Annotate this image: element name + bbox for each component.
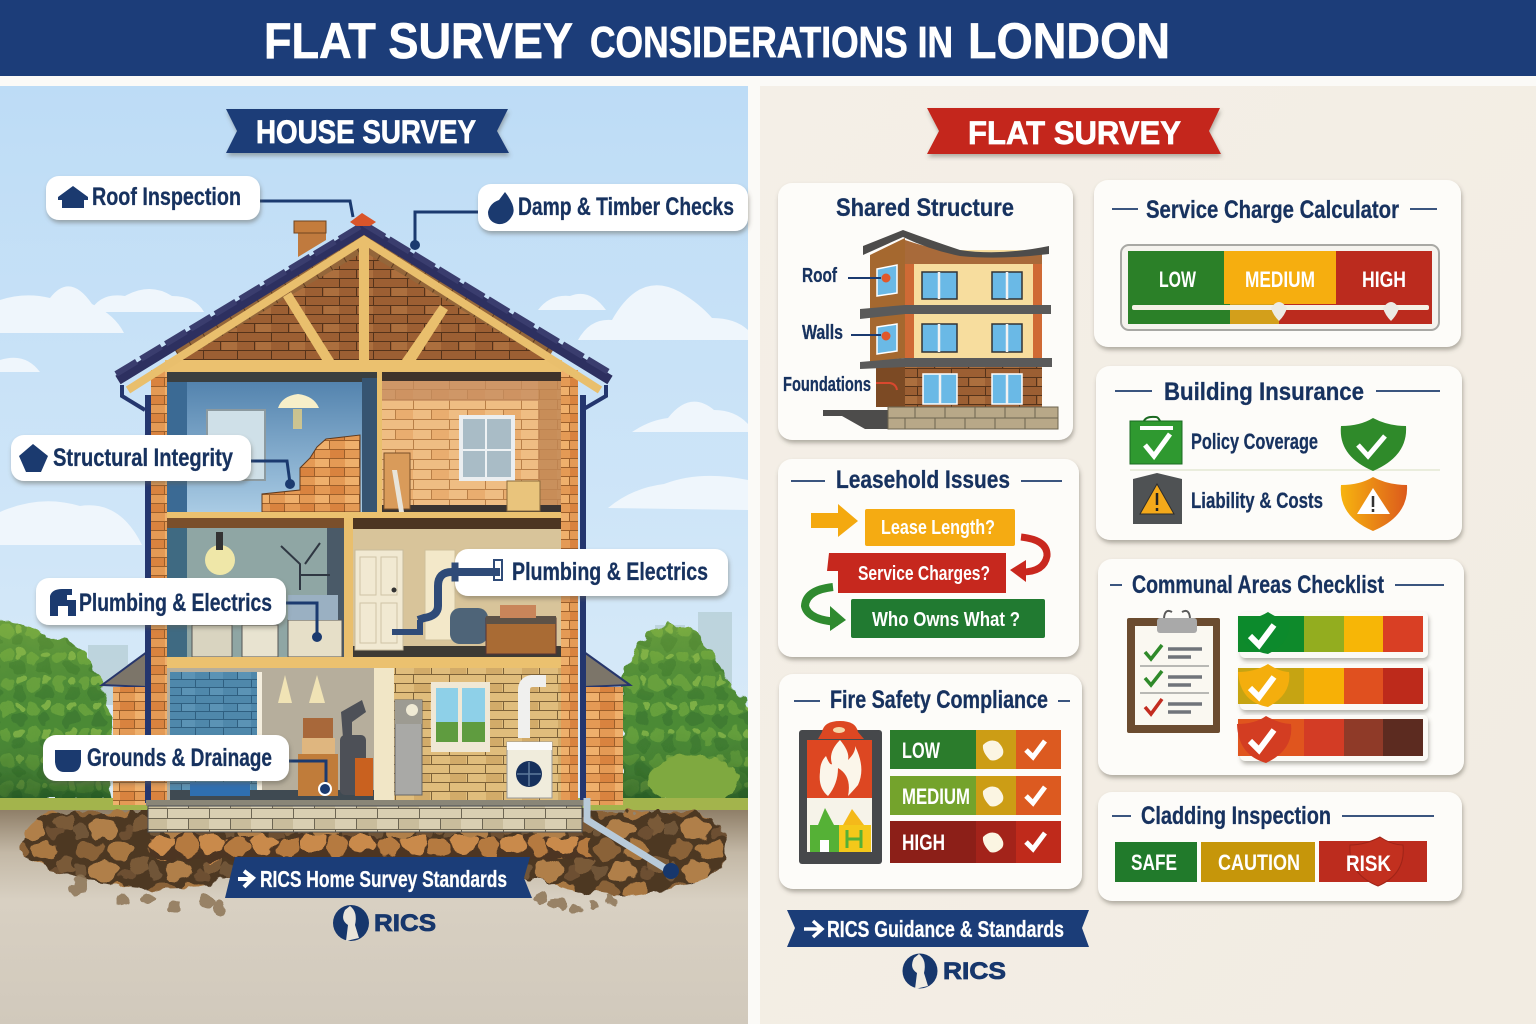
title: CONSIDERATIONS IN <box>590 18 953 67</box>
label: damp and timber checks: Damp & Timber Checks <box>518 193 734 221</box>
crate <box>507 481 540 511</box>
callout: walls <box>802 322 881 344</box>
scattered soil clods <box>71 876 615 914</box>
bar: amber row <box>1238 664 1428 710</box>
building icons <box>810 808 871 852</box>
tank <box>450 608 488 644</box>
ribbon: flat survey <box>927 108 1221 154</box>
icon: orange shield <box>1341 477 1407 531</box>
heading: Building Insurance <box>1164 378 1364 406</box>
middle floor beam <box>167 657 561 668</box>
appliances <box>192 595 342 657</box>
row: medium: MEDIUM <box>902 784 970 809</box>
fridge <box>395 700 422 795</box>
upper brick band <box>905 240 1042 264</box>
grass <box>0 798 748 811</box>
roof <box>863 230 1049 258</box>
status: caution: CAUTION <box>1218 850 1300 875</box>
icon: policy clipboard <box>1130 417 1182 464</box>
hanging lamp <box>205 532 235 575</box>
flue <box>524 681 546 738</box>
callout: roof <box>802 265 881 287</box>
gauge: MEDIUM <box>1245 267 1315 292</box>
marker dots <box>882 274 890 340</box>
ground floor left <box>167 668 374 800</box>
boxes <box>298 718 338 796</box>
card: communal areas checklist <box>1098 559 1464 775</box>
trees <box>0 622 760 806</box>
chimney <box>294 221 326 257</box>
ladder and bricks <box>384 453 410 512</box>
status: caution <box>1201 842 1315 882</box>
middle divider <box>344 518 353 659</box>
row: medium <box>890 776 1061 815</box>
brick corners <box>151 370 578 806</box>
divider <box>1130 469 1440 471</box>
connector lines <box>249 201 480 788</box>
banner: RICS guidance <box>787 910 1089 947</box>
callout: foundations: Foundations <box>783 374 871 396</box>
pill: service charges <box>827 553 1006 593</box>
heading: Service Charge Calculator <box>1146 196 1399 224</box>
pill: who owns what <box>851 599 1045 638</box>
panel: flat survey <box>760 86 1536 1024</box>
distant skyline <box>88 612 732 712</box>
front wall lower <box>905 367 1042 407</box>
label: structural integrity <box>11 435 251 481</box>
title: FLAT SURVEY <box>264 13 573 69</box>
arrow: red curve <box>1021 537 1047 572</box>
status: safe <box>1115 842 1197 882</box>
icon: roof <box>58 186 88 208</box>
clouds <box>0 285 748 545</box>
heading: Cladding Inspection <box>1141 802 1331 830</box>
tree right <box>622 625 760 806</box>
back door <box>425 550 455 640</box>
heading: Fire Safety Compliance <box>830 686 1048 714</box>
side wall lower <box>876 367 905 407</box>
icon: green shield <box>1341 418 1406 471</box>
tie beam <box>165 360 562 372</box>
ceiling lamp <box>278 394 319 408</box>
row: low: LOW <box>902 738 940 763</box>
status: risk: RISK <box>1346 851 1391 876</box>
arrow <box>811 504 858 537</box>
ground divider <box>374 668 394 800</box>
gauge: HIGH <box>1362 267 1406 292</box>
ground floor right <box>394 668 561 800</box>
corner bricks <box>905 264 1042 358</box>
logo: RICS <box>902 954 1006 989</box>
washing machine <box>507 742 552 798</box>
card: service charge calculator <box>1094 180 1461 347</box>
plumbing pipes <box>392 560 502 632</box>
status: risk <box>1319 837 1427 886</box>
label: grounds and drainage <box>43 735 289 781</box>
pill: service charges: Service Charges? <box>858 563 990 585</box>
middle left room <box>167 518 344 657</box>
gutters <box>122 385 606 410</box>
pill: lease length <box>865 509 1015 546</box>
foundation <box>148 806 582 832</box>
label: plumbing right <box>455 549 728 596</box>
building illustration <box>823 230 1058 429</box>
front wall upper <box>905 250 1042 306</box>
title <box>264 13 1170 69</box>
row: high <box>890 821 1061 863</box>
card: building insurance <box>1096 366 1462 540</box>
arrow: green curve <box>805 587 838 622</box>
icon: drain <box>55 750 81 772</box>
text: policy coverage: Policy Coverage <box>1191 429 1318 454</box>
label: roof inspection <box>46 176 260 220</box>
label: plumbing right: Plumbing & Electrics <box>512 558 708 586</box>
divider <box>377 372 382 518</box>
attic timbers <box>283 243 448 361</box>
card: leasehold issues <box>778 459 1079 657</box>
label: grounds and drainage: Grounds & Drainage <box>87 744 272 772</box>
floor line <box>146 800 584 806</box>
fire clipboard icon <box>799 721 882 864</box>
attic gable <box>170 240 558 362</box>
gauge: LOW <box>1159 267 1196 292</box>
rafters <box>128 240 600 390</box>
bar: green row <box>1238 612 1428 658</box>
arrow head red <box>1010 560 1026 582</box>
icon: arrow <box>238 871 253 887</box>
heading: Shared Structure <box>836 194 1014 222</box>
middle right room <box>353 518 561 657</box>
tree left <box>0 622 112 800</box>
arrow head green <box>830 606 846 631</box>
panel: house survey <box>0 86 760 1024</box>
clipboard <box>1127 611 1220 733</box>
ground <box>0 810 748 1024</box>
logo: RICS: RICS <box>374 910 436 937</box>
pill: lease length: Lease Length? <box>881 517 995 539</box>
title: LONDON <box>968 13 1170 69</box>
side extension right <box>584 652 630 805</box>
house cutaway <box>116 213 612 832</box>
floor slabs <box>860 305 1052 369</box>
icon: warning panel <box>1133 473 1182 524</box>
gauge <box>1121 245 1439 330</box>
ridge cap <box>350 213 376 226</box>
soil <box>18 812 726 896</box>
side wall <box>870 238 905 362</box>
roof shingle edge <box>116 224 612 374</box>
boiler unit <box>340 700 366 795</box>
row: high: HIGH <box>902 830 945 855</box>
ribbon: house survey: HOUSE SURVEY <box>256 114 476 150</box>
damaged brick wall <box>262 435 360 512</box>
side extension left <box>102 652 149 805</box>
door <box>355 550 403 650</box>
bar: red row <box>1237 715 1428 763</box>
slider markers <box>1271 302 1399 321</box>
card: cladding inspection <box>1098 792 1462 901</box>
card: shared structure <box>778 183 1073 440</box>
chest <box>486 618 556 654</box>
soffit <box>176 240 552 352</box>
label: plumbing left: Plumbing & Electrics <box>79 589 272 617</box>
drain pipe <box>587 798 679 879</box>
icon: diamond <box>19 444 48 472</box>
banner: RICS home survey standards <box>225 857 532 898</box>
label: structural integrity: Structural Integrity <box>53 444 233 472</box>
heading: Communal Areas Checklist <box>1132 571 1385 599</box>
plinth <box>823 407 1058 429</box>
banner: RICS home survey standards: RICS Home Survey Standards <box>260 866 507 892</box>
top right room <box>382 372 561 512</box>
callout: walls: Walls <box>802 322 843 344</box>
pill: who owns what: Who Owns What ? <box>872 609 1020 631</box>
label: roof inspection: Roof Inspection <box>92 183 241 211</box>
text: liability and costs: Liability & Costs <box>1191 488 1323 513</box>
flame <box>820 740 861 796</box>
header banner <box>0 0 1536 76</box>
first floor beam <box>167 512 561 518</box>
callout: roof: Roof <box>802 265 837 287</box>
status: safe: SAFE <box>1131 850 1177 875</box>
downpipes <box>145 395 586 803</box>
top left room <box>167 372 377 512</box>
window <box>431 682 490 752</box>
banner: RICS guidance: RICS Guidance & Standards <box>827 916 1064 942</box>
windows <box>877 265 1022 404</box>
heading: Leasehold Issues <box>836 466 1010 494</box>
roof shingles <box>118 229 610 380</box>
icon: arrow <box>804 921 822 937</box>
pendant lights <box>278 675 325 703</box>
logo: RICS <box>333 905 436 941</box>
card: fire safety compliance <box>779 674 1082 889</box>
connector dots <box>285 240 420 795</box>
label: damp and timber checks <box>478 184 748 231</box>
soffit ribs <box>176 240 552 352</box>
icon: tap <box>50 589 76 616</box>
window <box>459 415 515 481</box>
logo: RICS: RICS <box>943 958 1006 985</box>
row: low <box>890 730 1061 769</box>
ribbon: flat survey: FLAT SURVEY <box>968 115 1181 151</box>
icon: water drop <box>488 192 514 224</box>
label: plumbing left <box>36 578 286 625</box>
